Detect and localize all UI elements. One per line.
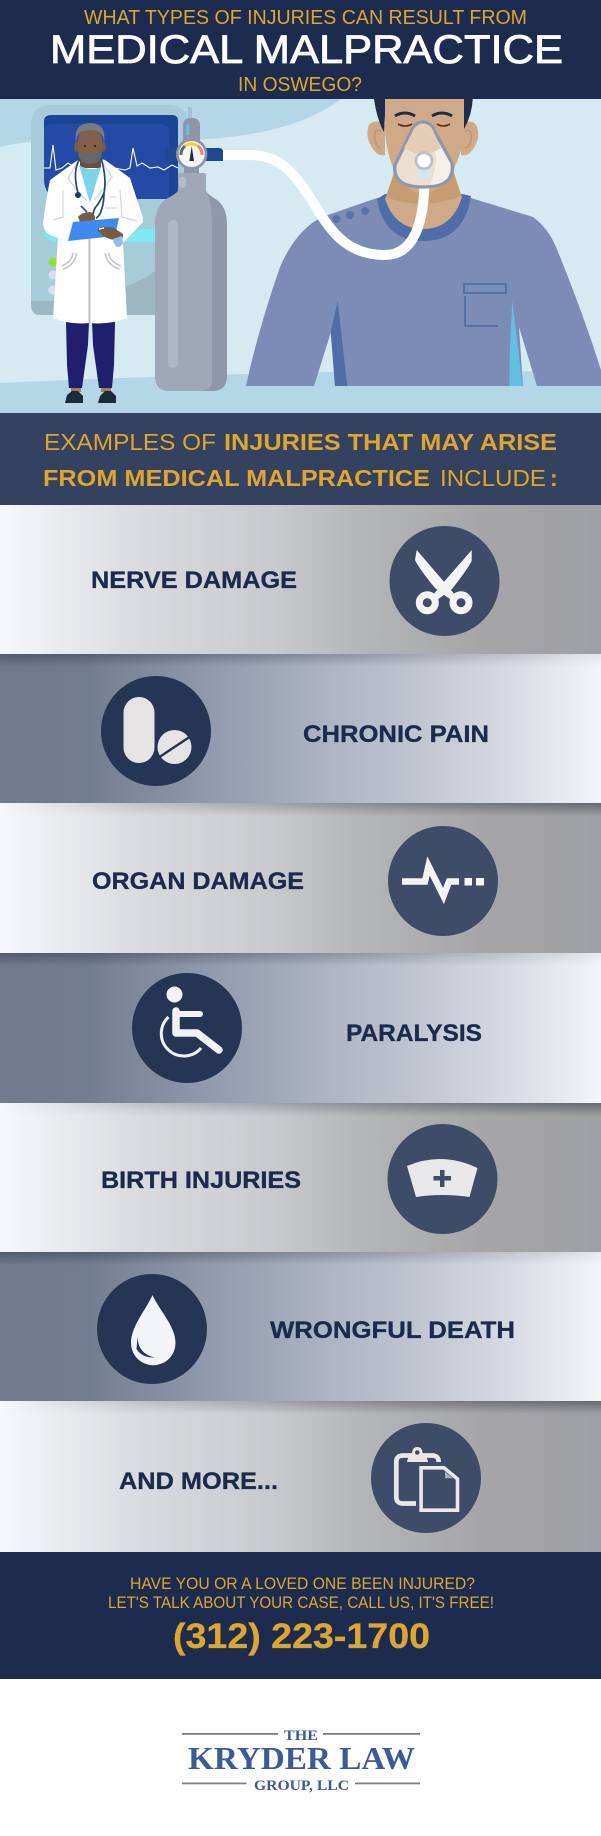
title line 2: MEDICAL MALPRACTICE: [50, 28, 563, 72]
neck: [80, 150, 101, 168]
title line 3: IN OSWEGO?: [238, 74, 362, 96]
call to action text: LET'S TALK ABOUT YOUR CASE, CALL US, IT'S FREE!: [108, 1593, 494, 1612]
panel: chronic pain: [0, 654, 601, 803]
icon: scissors: [390, 526, 500, 636]
pockets: [62, 253, 120, 268]
label: NERVE DAMAGE: [91, 567, 297, 594]
oxygen mask: [395, 122, 452, 187]
icon: pills: [101, 676, 211, 786]
label: WRONGFUL DEATH: [270, 1317, 515, 1344]
heart trace: [44, 145, 178, 170]
label: PARALYSIS: [346, 1020, 482, 1047]
collar: [377, 194, 471, 241]
subheading band: EXAMPLES OF: [44, 429, 216, 455]
logo: The Kryder Law Group: GROUP, LLC: [254, 1778, 349, 1794]
patient: [223, 99, 601, 386]
ankles: [71, 388, 111, 392]
phone number: (312) 223-1700: [173, 1617, 430, 1656]
header banner: [0, 0, 601, 99]
cuff: [113, 236, 123, 247]
lab coat: [43, 158, 143, 323]
gauge: [164, 138, 223, 170]
panel: and more: [0, 1401, 601, 1552]
shoulder buttons: [332, 215, 340, 223]
subheading band: INJURIES THAT MAY ARISE: [224, 429, 557, 455]
panel: organ damage: [0, 803, 601, 953]
oxygen tank: [155, 106, 227, 391]
shirt pocket: [464, 284, 506, 326]
illustration: doctor, oxygen tank and patient: [0, 99, 601, 413]
footer call to action: [0, 1552, 601, 1679]
hair: [374, 99, 385, 132]
hospital monitor: [31, 105, 188, 315]
label: ORGAN DAMAGE: [92, 868, 304, 895]
lapels: [68, 160, 112, 201]
logo: The Kryder Law Group: THE: [284, 1728, 318, 1744]
logo: The Kryder Law Group: [182, 1728, 420, 1794]
icon: clipboard: [371, 1423, 481, 1533]
face: [385, 99, 464, 194]
icon: nurse cap: [388, 1124, 498, 1234]
label: AND MORE...: [119, 1468, 278, 1495]
head: [74, 123, 106, 164]
icon: wheelchair: [132, 973, 242, 1083]
sweater folds: [331, 301, 347, 386]
logo: The Kryder Law Group: KRYDER LAW: [188, 1740, 415, 1776]
stethoscope: [75, 158, 105, 218]
subheading band: :: [550, 465, 558, 491]
subheading band: FROM MEDICAL MALPRACTICE: [43, 465, 430, 491]
ears: [367, 122, 478, 155]
doctor: [43, 123, 143, 403]
subheading band: [0, 413, 601, 506]
pen: [81, 206, 87, 212]
panel: paralysis: [0, 953, 601, 1103]
neck: [385, 170, 462, 229]
label: CHRONIC PAIN: [303, 721, 489, 748]
icon: drop: [97, 1274, 207, 1384]
clipboard: [68, 218, 119, 241]
subheading band: INCLUDE: [440, 465, 546, 491]
coat fold lines: [53, 190, 137, 221]
oxygen tube: [223, 155, 424, 255]
trousers: [66, 322, 89, 388]
shirt: [79, 165, 101, 203]
call to action text: HAVE YOU OR A LOVED ONE BEEN INJURED?: [130, 1574, 475, 1593]
panel: nerve damage: [0, 505, 601, 654]
holding hand: [98, 227, 123, 240]
icon: heartbeat: [388, 826, 498, 936]
label: BIRTH INJURIES: [101, 1167, 301, 1194]
sweater: [246, 198, 601, 386]
eyebrows and eyes: [395, 113, 452, 116]
call to action text: [108, 1574, 494, 1612]
illustration background: [0, 99, 601, 413]
title line 1: WHAT TYPES OF INJURIES CAN RESULT FROM: [84, 7, 527, 29]
shoes: [65, 391, 83, 403]
writing hand: [78, 212, 95, 222]
panel: wrongful death: [0, 1252, 601, 1401]
panel: birth injuries: [0, 1103, 601, 1252]
